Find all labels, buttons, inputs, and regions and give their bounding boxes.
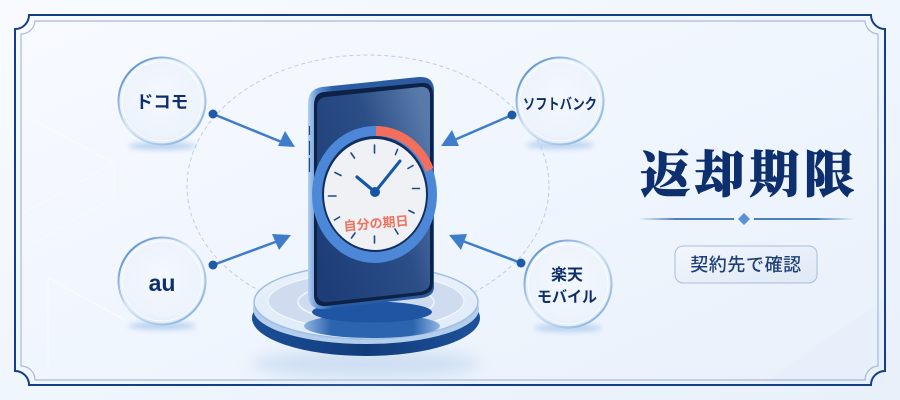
title: 返却期限 bbox=[640, 147, 854, 203]
carrier: softbank: ソフトバンク bbox=[523, 96, 597, 113]
arrow: docomo to clock bbox=[208, 110, 295, 147]
clock label: 自分の期日 bbox=[343, 213, 409, 234]
red deadline arc bbox=[376, 126, 434, 172]
clock bbox=[312, 126, 437, 263]
carrier: au bbox=[118, 238, 206, 330]
carrier: rakuten mobile: モバイル bbox=[537, 289, 597, 306]
carrier: softbank bbox=[516, 58, 604, 148]
smartphone bbox=[308, 77, 434, 309]
arrow: au to clock bbox=[208, 234, 291, 270]
dashed orbit bbox=[187, 55, 549, 317]
arrow: softbank to clock bbox=[441, 110, 516, 146]
phone side buttons bbox=[308, 126, 310, 172]
carrier: au: au bbox=[149, 270, 175, 296]
title divider with diamond bbox=[638, 213, 855, 225]
carrier: docomo bbox=[118, 58, 206, 150]
clock ticks bbox=[328, 145, 420, 243]
carrier: docomo: ドコモ bbox=[136, 92, 188, 112]
badge: check with your carrier: 契約先で確認 bbox=[690, 255, 802, 275]
carrier: rakuten mobile bbox=[524, 240, 612, 332]
arrow: rakuten to clock bbox=[449, 234, 526, 268]
glass pedestal bbox=[251, 265, 481, 378]
clock hands bbox=[357, 161, 400, 192]
badge: check with your carrier bbox=[675, 246, 817, 283]
carrier: rakuten mobile: 楽天 bbox=[551, 265, 583, 284]
